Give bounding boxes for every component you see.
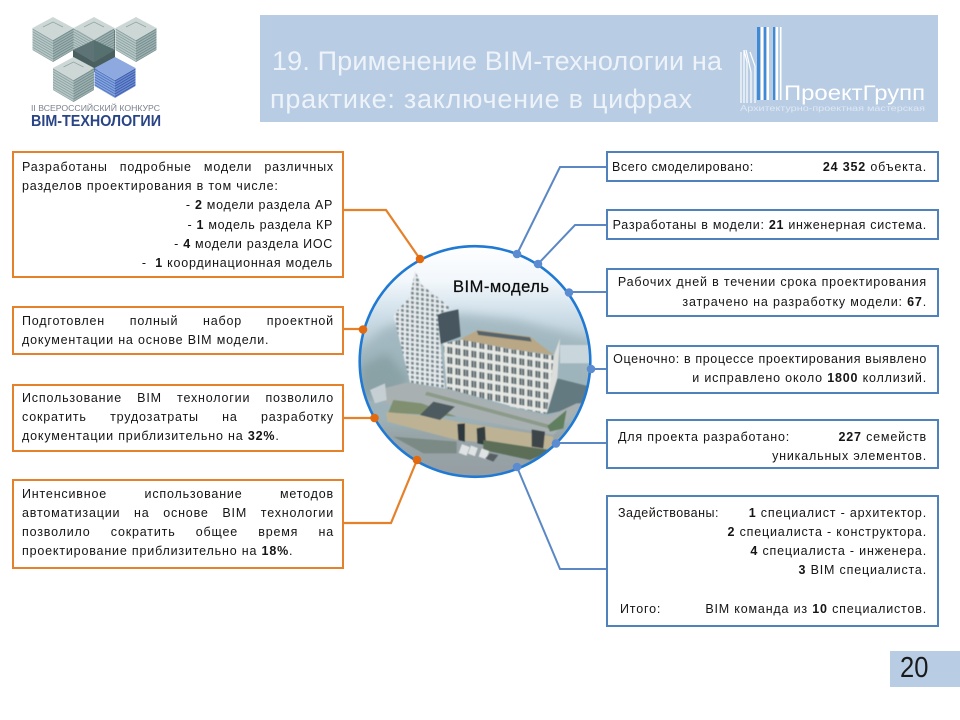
panel: team: 2 специалиста - конструктора.: [728, 525, 927, 539]
title and company logo: 19. Применение BIM-технологии на: [272, 46, 723, 76]
panel: modelled objects: 24 352 объекта.: [823, 160, 927, 174]
title and company logo: ПроектГрупп: [784, 82, 925, 105]
blue connector dots: [513, 250, 595, 471]
panel: documentation: [12, 306, 344, 355]
panel: time saving 18%: [12, 479, 344, 569]
panel: detailed models: - 1 модель раздела КР: [187, 218, 333, 232]
panel: time saving 18%: проектирование приблизительно на 18%.: [22, 544, 293, 558]
panel: collisions: Оценочно: в процессе проектирования выявлено: [613, 352, 927, 366]
title and company logo: [270, 27, 925, 114]
panel: collisions: [606, 345, 939, 394]
header banner: [260, 15, 938, 122]
panel: working days: [606, 268, 939, 317]
circle outline: [360, 246, 590, 477]
panel: detailed models: - 1 координационная модель: [142, 256, 333, 270]
label: BIM-модель: BIM-модель: [453, 278, 549, 296]
panel: working days: затрачено на разработку модели: 67.: [682, 295, 927, 309]
title and company logo: Архитектурно-проектная мастерская: [740, 104, 925, 113]
panel: engineering systems: [606, 209, 939, 240]
panel: families: уникальных элементов.: [772, 449, 927, 463]
panel: families: [606, 419, 939, 469]
logo: BIM technologies contest: [31, 17, 161, 130]
panel: team: Итого:: [620, 602, 661, 616]
panel: detailed models: - 2 модели раздела АР: [186, 198, 333, 212]
panel: team: 3 BIM специалиста.: [798, 563, 927, 577]
page number: 20: [900, 652, 928, 684]
panel: team: 4 специалиста - инженера.: [750, 544, 927, 558]
panel: families: Для проекта разработано:: [618, 430, 790, 444]
panel: engineering systems: Разработаны в модели: 21 инженерная система.: [613, 218, 927, 232]
panel: time saving 18%: Интенсивное использование методов: [22, 487, 334, 501]
right connectors (blue): [517, 167, 607, 569]
panel: families: 227 семейств: [838, 430, 927, 444]
building photo in circle: [361, 267, 589, 476]
title and company logo: практике: заключение в цифрах: [270, 84, 692, 114]
orange connector dots: [359, 255, 424, 464]
panel: team: Задействованы:: [618, 506, 719, 520]
panel: documentation: документации на основе BIM модели.: [22, 333, 269, 347]
central diagram: BIM model with connectors: [344, 166, 606, 570]
panel: detailed models: - 4 модели раздела ИОС: [174, 237, 333, 251]
panel: working days: Рабочих дней в течении срока проектирования: [618, 275, 927, 289]
panel: modelled objects: [606, 151, 939, 182]
logo: BIM technologies contest: BIM-ТЕХНОЛОГИИ: [31, 113, 161, 130]
left connectors (orange): [343, 210, 420, 523]
panel: time saving 18%: позволило сократить общее время на: [22, 525, 334, 539]
panel: time saving 18%: автоматизации на основе BIM технологии: [22, 506, 334, 520]
panel: labour saving 32%: сократить трудозатраты на разработку: [22, 410, 334, 424]
panel: modelled objects: Всего смоделировано:: [612, 160, 754, 174]
panel: labour saving 32%: [12, 384, 344, 452]
panel: collisions: и исправлено около 1800 коллизий.: [692, 371, 927, 385]
page number: [890, 651, 960, 687]
panel: detailed models: [12, 151, 344, 278]
panel: labour saving 32%: Использование BIM технологии позволило: [22, 391, 334, 405]
panel: team: [606, 495, 939, 627]
panel: team: BIM команда из 10 специалистов.: [705, 602, 927, 616]
panel: documentation: Подготовлен полный набор проектной: [22, 314, 334, 328]
panel: team: 1 специалист - архитектор.: [749, 506, 927, 520]
panel: detailed models: Разработаны подробные модели различных: [22, 160, 334, 174]
panel: detailed models: разделов проектирования в том числе:: [22, 179, 279, 193]
logo: BIM technologies contest: II ВСЕРОССИЙСКИЙ КОНКУРС: [31, 104, 160, 113]
panel: labour saving 32%: документации приблизительно на 32%.: [22, 429, 280, 443]
